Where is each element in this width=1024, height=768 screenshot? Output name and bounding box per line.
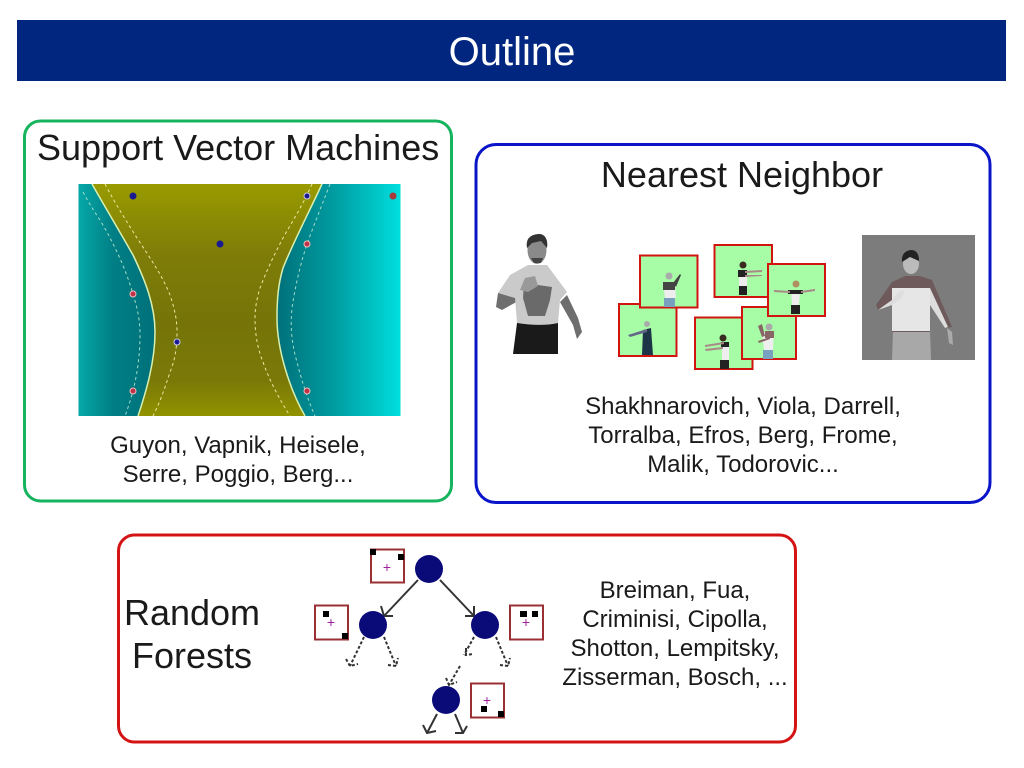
text: nearest neighbor authors: Malik, Todorovic... bbox=[647, 451, 839, 478]
thumbnail 5 bbox=[714, 245, 772, 297]
patch: right node bbox=[510, 606, 543, 640]
text: random forests authors: Zisserman, Bosch, ... bbox=[562, 664, 788, 691]
thumbnail 2 bbox=[640, 256, 698, 308]
thumbnail 3 bbox=[695, 318, 752, 369]
image: pose thumbnail collage bbox=[619, 245, 825, 369]
panel: nearest neighbor bbox=[476, 144, 990, 502]
patch: lower node bbox=[471, 684, 504, 718]
diagram: decision tree bbox=[315, 549, 543, 733]
patch: left node bbox=[315, 606, 348, 640]
title bar: Outline bbox=[449, 30, 575, 74]
image: person in t-shirt bbox=[496, 234, 582, 354]
title bar bbox=[17, 20, 1006, 81]
chart: svm decision boundary bbox=[78, 184, 400, 416]
patch: right node: + bbox=[522, 614, 530, 630]
patch: left node: + bbox=[327, 614, 335, 630]
thumbnail 1 bbox=[619, 304, 676, 356]
panel: random forests bbox=[118, 535, 796, 742]
heading: support vector machines: Support Vector Machines bbox=[37, 127, 439, 168]
text: random forests authors: Criminisi, Cipolla, bbox=[582, 606, 768, 633]
heading: nearest neighbor: Nearest Neighbor bbox=[601, 154, 883, 195]
text: svm authors: Serre, Poggio, Berg... bbox=[123, 461, 353, 488]
text: random forests authors: Shotton, Lempitsky, bbox=[570, 635, 780, 662]
heading: random forests: Forests bbox=[132, 635, 252, 676]
text: random forests authors: Breiman, Fua, bbox=[600, 577, 750, 604]
text: nearest neighbor authors: Shakhnarovich, Viola, Darrell, bbox=[585, 393, 901, 420]
thumbnail 4 bbox=[742, 307, 796, 359]
patch: root node: + bbox=[383, 559, 391, 575]
patch: lower node: + bbox=[483, 692, 491, 708]
image: rendered 3d figure bbox=[862, 235, 975, 360]
thumbnail 6 bbox=[768, 264, 825, 316]
text: nearest neighbor authors: Torralba, Efros, Berg, Frome, bbox=[588, 422, 898, 449]
heading: random forests: Random bbox=[124, 592, 260, 633]
panel: support vector machines bbox=[24, 121, 452, 501]
text: svm authors: Guyon, Vapnik, Heisele, bbox=[110, 432, 366, 459]
patch: root node bbox=[370, 549, 404, 582]
